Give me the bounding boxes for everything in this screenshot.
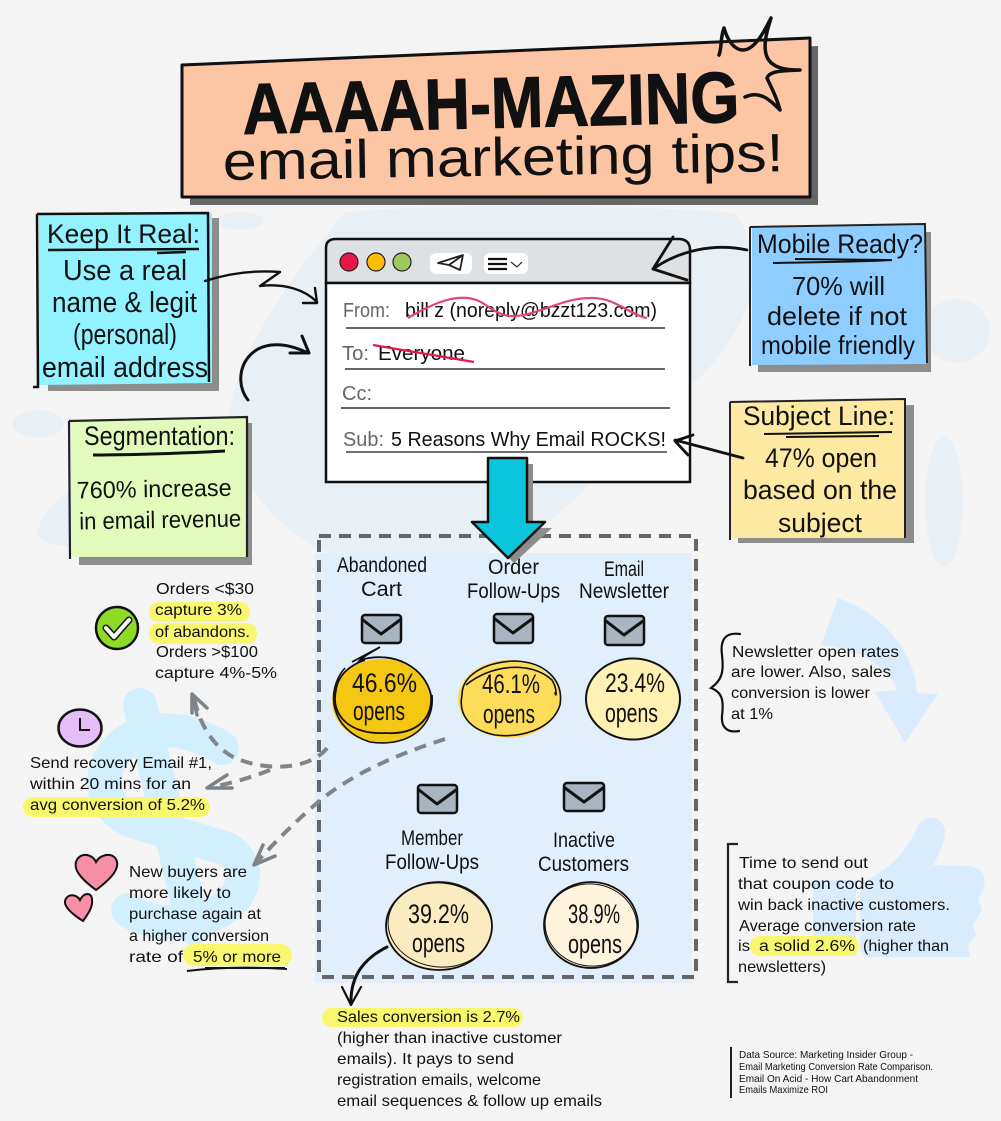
body text: email address: [42, 352, 208, 384]
text: abandoned cart orders: capture 4%-5%: [155, 665, 277, 682]
background thumbs up: [813, 818, 985, 957]
data source: [731, 1047, 933, 1098]
to field: [342, 343, 665, 369]
background dollar sign: [104, 705, 243, 928]
text: sales conversion: emails). It pays to send: [337, 1051, 514, 1068]
text: abandoned cart orders: Orders >$100: [156, 644, 258, 661]
arrow: to field: [241, 336, 309, 400]
circle: 46.6% opens: [332, 647, 432, 743]
dashed arrow: to new buyers text: [254, 739, 445, 865]
heading: Mobile Ready?: [757, 229, 923, 259]
icon: envelope: [362, 615, 401, 643]
circle: 39.2% opens: opens: [412, 928, 465, 958]
window buttons: [340, 253, 411, 271]
circle: 46.1% opens: 46.1%: [482, 669, 540, 699]
big down arrow: [472, 458, 552, 563]
dashed arrow: to recovery email text: [207, 770, 270, 788]
heading: Keep It Real:: [47, 219, 200, 249]
body text: subject: [778, 508, 862, 538]
data source: Email On Acid - How Cart Abandonment: [739, 1073, 918, 1085]
clock icon: [58, 710, 102, 746]
text: new buyers: purchase again at: [129, 906, 262, 923]
background arrow: [821, 598, 938, 743]
text: coupon note: [728, 844, 950, 982]
body text: [761, 271, 915, 360]
check icon: [96, 607, 138, 649]
label: email newsletter: Newsletter: [579, 580, 669, 603]
icon: paper plane: [430, 253, 472, 274]
body text: Use a real: [63, 255, 187, 287]
text: newsletter note: at 1%: [731, 706, 773, 723]
body text: 760% increase: [76, 475, 232, 504]
circle: 46.6% opens: 46.6%: [352, 668, 417, 698]
text: newsletter note: conversion is lower: [731, 685, 871, 702]
circle: 38.9% opens: opens: [568, 929, 622, 959]
text: coupon note: win back inactive customers.: [737, 897, 950, 914]
circle: 23.4% opens: [586, 658, 680, 740]
subject field: Sub:: [343, 429, 384, 451]
label: abandoned cart: Cart: [361, 578, 402, 601]
card: segmentation: [69, 417, 252, 565]
text: new buyers: rate of: [129, 949, 184, 966]
text: recovery email: avg conversion of 5.2%: [30, 797, 205, 814]
icon: envelope: [494, 614, 533, 643]
arrow: mobile ready to window: [653, 237, 747, 280]
circle: 46.1% opens: [458, 660, 561, 738]
label: inactive customers: [538, 829, 629, 876]
cc field: Cc:: [342, 383, 372, 405]
circle: 39.2% opens: [384, 878, 496, 972]
text: newsletter note: Newsletter open rates: [732, 644, 899, 661]
text: new buyers: a higher conversion: [129, 928, 269, 945]
arrow: member follow-ups to sales conversion: [342, 947, 387, 1005]
title line one: AAAAH-MAZING: [241, 58, 740, 150]
text: coupon note: (higher than: [863, 938, 949, 955]
from field: From:: [343, 300, 390, 322]
text: sales conversion: registration emails, welcome: [337, 1072, 541, 1089]
body text: delete if not: [767, 301, 908, 331]
text: sales conversion: (higher than inactive customer: [337, 1030, 563, 1047]
to field: To:: [342, 343, 369, 365]
text: new buyers: New buyers are: [129, 864, 247, 881]
card: keep it real: [33, 213, 219, 391]
text: recovery email: within 20 mins for an: [29, 776, 191, 793]
card: mobile ready: [750, 224, 931, 372]
body text: [743, 443, 897, 538]
body text: [42, 255, 208, 384]
background blobs: [12, 206, 990, 567]
heading: Segmentation:: [84, 421, 235, 451]
icon: envelope: [605, 616, 644, 645]
card: subject line: [730, 399, 914, 543]
heart icons: [65, 855, 117, 921]
arrow: subject line to subject field: [675, 435, 743, 458]
circle: 46.1% opens: opens: [483, 699, 535, 729]
email window: [326, 239, 690, 482]
text: new buyers: [65, 855, 292, 971]
label: member follow-ups: Member: [401, 827, 463, 850]
text: coupon note: a solid 2.6%: [759, 938, 855, 955]
from field: bill z (noreply@bzzt123.com): [405, 300, 657, 322]
text: newsletter note: are lower. Also, sales: [731, 664, 891, 681]
from field: [343, 298, 665, 328]
text: abandoned cart orders: Orders <$30: [156, 581, 254, 598]
heading: Subject Line:: [743, 401, 895, 431]
label: inactive customers: Inactive: [553, 829, 615, 852]
icon: envelope: [564, 783, 604, 811]
body text: mobile friendly: [761, 330, 915, 360]
circle: 38.9% opens: [540, 878, 642, 972]
text: abandoned cart orders: [96, 581, 277, 682]
text: newsletter note: [711, 634, 899, 731]
text: coupon note: Time to send out: [739, 855, 869, 872]
text: coupon note: that coupon code to: [738, 876, 894, 893]
icon: menu: [484, 253, 528, 274]
arrow: keep it real to from field: [205, 271, 317, 303]
label: order follow-ups: [467, 556, 560, 603]
circle: 46.6% opens: opens: [353, 696, 405, 726]
body text: name & legit: [52, 287, 197, 319]
text: recovery email: [23, 710, 212, 817]
body text: [76, 475, 241, 535]
text: recovery email: Send recovery Email #1,: [30, 755, 212, 772]
title line two: email marketing tips!: [222, 123, 784, 192]
label: member follow-ups: Follow-Ups: [385, 851, 479, 874]
label: email newsletter: Email: [604, 558, 644, 581]
label: abandoned cart: Abandoned: [337, 554, 427, 577]
text: coupon note: is: [738, 938, 750, 955]
data source: Email Marketing Conversion Rate Comparison.: [739, 1061, 933, 1073]
text: sales conversion: Sales conversion is 2.7%: [337, 1009, 520, 1026]
label: member follow-ups: [385, 827, 479, 874]
data source: Emails Maximize ROI: [739, 1084, 828, 1096]
icon: envelope: [418, 785, 457, 813]
title banner: [182, 18, 818, 205]
text: new buyers: more likely to: [129, 885, 231, 902]
body text: 47% open: [765, 443, 877, 473]
body text: based on the: [743, 475, 897, 505]
text: abandoned cart orders: of abandons.: [155, 624, 250, 641]
text: abandoned cart orders: capture 3%: [155, 602, 242, 619]
body text: 70% will: [792, 271, 885, 301]
label: abandoned cart: [337, 554, 427, 601]
circle: 23.4% opens: opens: [605, 698, 658, 728]
text: sales conversion: [322, 1008, 602, 1110]
circle: 38.9% opens: 38.9%: [568, 899, 620, 929]
dashed email types panel: [315, 536, 696, 983]
circle: 39.2% opens: 39.2%: [408, 899, 469, 929]
label: email newsletter: [579, 558, 669, 603]
circle: 23.4% opens: 23.4%: [605, 668, 665, 698]
text: coupon note: newsletters): [738, 959, 826, 976]
subject field: 5 Reasons Why Email ROCKS!: [391, 429, 666, 451]
label: order follow-ups: Follow-Ups: [467, 580, 560, 603]
to field: Everyone: [378, 343, 465, 365]
body text: in email revenue: [79, 506, 241, 535]
label: inactive customers: Customers: [538, 853, 629, 876]
label: order follow-ups: Order: [488, 556, 539, 579]
text: new buyers: 5% or more: [193, 949, 281, 966]
text: sales conversion: email sequences & follow up emails: [337, 1093, 602, 1110]
dashed arrow: to orders text: [192, 694, 327, 767]
text: coupon note: Average conversion rate: [739, 918, 916, 935]
data source: Data Source: Marketing Insider Group -: [739, 1049, 913, 1061]
body text: (personal): [73, 319, 177, 351]
starburst: [719, 18, 800, 110]
